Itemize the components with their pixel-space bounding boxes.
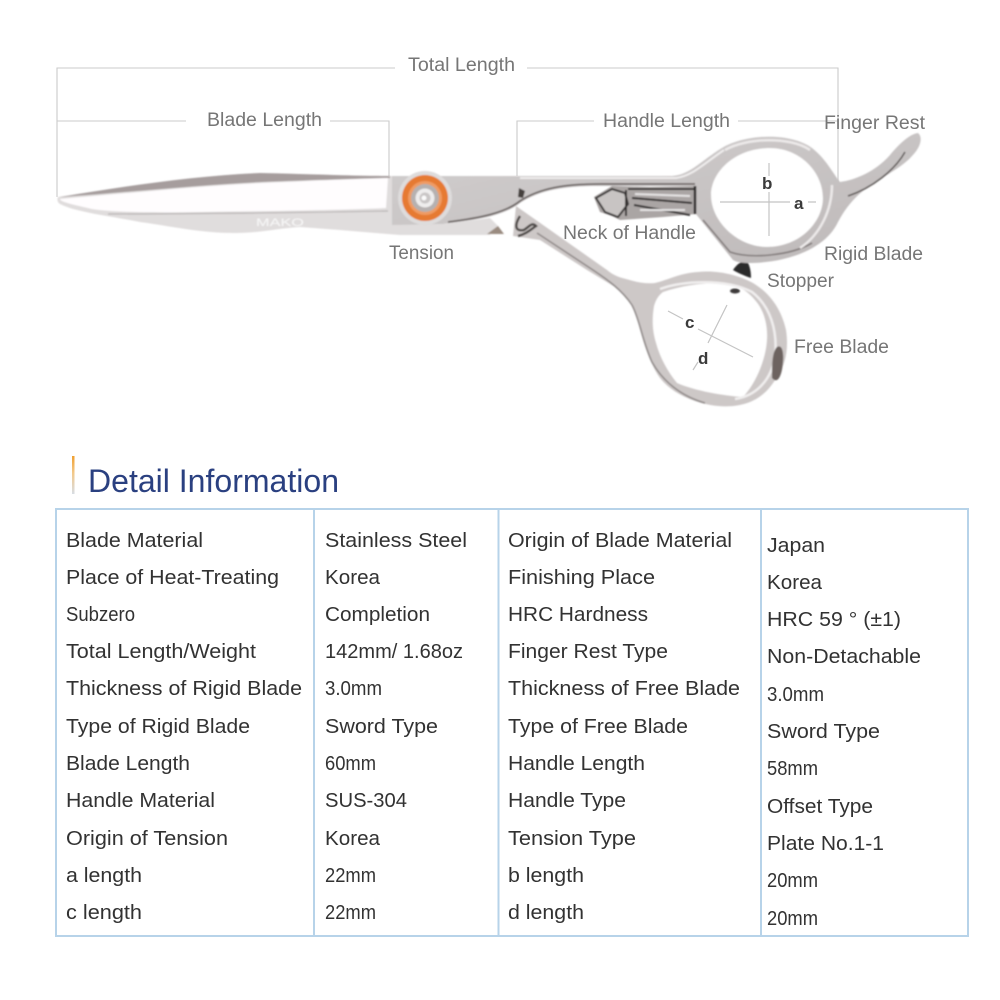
diagram labels: Finger Rest (824, 113, 926, 134)
table column 3: attribute names (508, 530, 740, 924)
table column 4: values: 3.0mm (767, 684, 824, 706)
diagram labels (207, 55, 926, 358)
table column 2: values: 142mm/ 1.68oz (325, 641, 463, 663)
table column 2: values: Korea (325, 567, 381, 589)
ring labels: c (685, 313, 694, 332)
diagram labels: Rigid Blade (824, 244, 923, 265)
small dark detail (730, 288, 740, 294)
table column 3: attribute names: Finger Rest Type (508, 641, 668, 663)
table column 4: values: 20mm (767, 870, 818, 892)
table column 3: attribute names: Thickness of Free Blade (508, 678, 740, 700)
table column 1: attribute names: Thickness of Rigid Blade (66, 678, 302, 700)
table column 2: values: Korea (325, 828, 381, 850)
ring labels: d (698, 349, 708, 368)
diagram labels: Free Blade (794, 337, 889, 358)
table column 2: values: 22mm (325, 865, 376, 887)
ring labels: a (794, 194, 804, 213)
free blade handle and ring (513, 206, 787, 406)
stopper (733, 261, 751, 278)
table column 1: attribute names: Blade Material (66, 530, 203, 552)
table column 2: values: 3.0mm (325, 678, 382, 700)
diagram labels: Total Length (408, 55, 515, 76)
table column 2: values: SUS-304 (325, 790, 407, 812)
table column 2: values (325, 530, 467, 924)
table column 3: attribute names: Handle Type (508, 790, 626, 812)
table column 3: attribute names: HRC Hardness (508, 604, 648, 626)
finger hole slot (772, 346, 783, 380)
table column 3: attribute names: Handle Length (508, 753, 645, 775)
table column 3: attribute names: Finishing Place (508, 567, 655, 589)
rigid handle and finger rest (388, 133, 921, 263)
table column 4: values: Korea (767, 572, 823, 594)
table column 4: values: Non-Detachable (767, 646, 921, 668)
table column 4: values: Japan (767, 535, 825, 557)
tension screw (398, 171, 452, 225)
blade engraving: MAKO (256, 217, 305, 229)
table column 1: attribute names: Total Length/Weight (66, 641, 256, 663)
table column 4: values: HRC 59 ° (±1) (767, 609, 901, 631)
table column 1: attribute names: a length (66, 865, 142, 887)
table column 3: attribute names: d length (508, 902, 584, 924)
diagram labels: Stopper (767, 271, 835, 292)
diagram labels: Blade Length (207, 110, 322, 131)
table column 4: values: 20mm (767, 908, 818, 930)
table column 1: attribute names (66, 530, 302, 924)
table column 1: attribute names: c length (66, 902, 142, 924)
diagram labels: Handle Length (603, 111, 730, 132)
table column 2: values: 22mm (325, 902, 376, 924)
table column 1: attribute names: Type of Rigid Blade (66, 716, 250, 738)
ring labels: b (762, 174, 772, 193)
table column 2: values: 60mm (325, 753, 376, 775)
table column 4: values: Offset Type (767, 796, 873, 818)
table frame (56, 509, 968, 936)
diagram labels: Neck of Handle (563, 223, 696, 244)
table column 2: values: Stainless Steel (325, 530, 467, 552)
ring labels (685, 174, 804, 368)
table column 3: attribute names: Origin of Blade Material (508, 530, 732, 552)
table column 1: attribute names: Subzero (66, 604, 135, 626)
table column 4: values (767, 535, 921, 930)
dimension lines (57, 68, 838, 197)
table column 2: values: Sword Type (325, 716, 438, 738)
table column 1: attribute names: Handle Material (66, 790, 215, 812)
table column 1: attribute names: Origin of Tension (66, 828, 228, 850)
table column 3: attribute names: b length (508, 865, 584, 887)
table column 1: attribute names: Place of Heat-Treating (66, 567, 279, 589)
scissors illustration (57, 133, 921, 406)
section accent bar (72, 456, 74, 494)
table column 1: attribute names: Blade Length (66, 753, 190, 775)
heading: Detail Information: Detail Information (88, 463, 339, 499)
table column 4: values: 58mm (767, 758, 818, 780)
table column 4: values: Plate No.1-1 (767, 833, 884, 855)
table column 4: values: Sword Type (767, 721, 880, 743)
blade (57, 173, 498, 235)
table column 2: values: Completion (325, 604, 430, 626)
neck ornament (594, 186, 696, 220)
table column 3: attribute names: Type of Free Blade (508, 716, 688, 738)
ring measurement lines (668, 163, 816, 370)
table column 3: attribute names: Tension Type (508, 828, 636, 850)
diagram labels: Tension (389, 243, 454, 264)
pivot lower wedge (487, 226, 504, 234)
